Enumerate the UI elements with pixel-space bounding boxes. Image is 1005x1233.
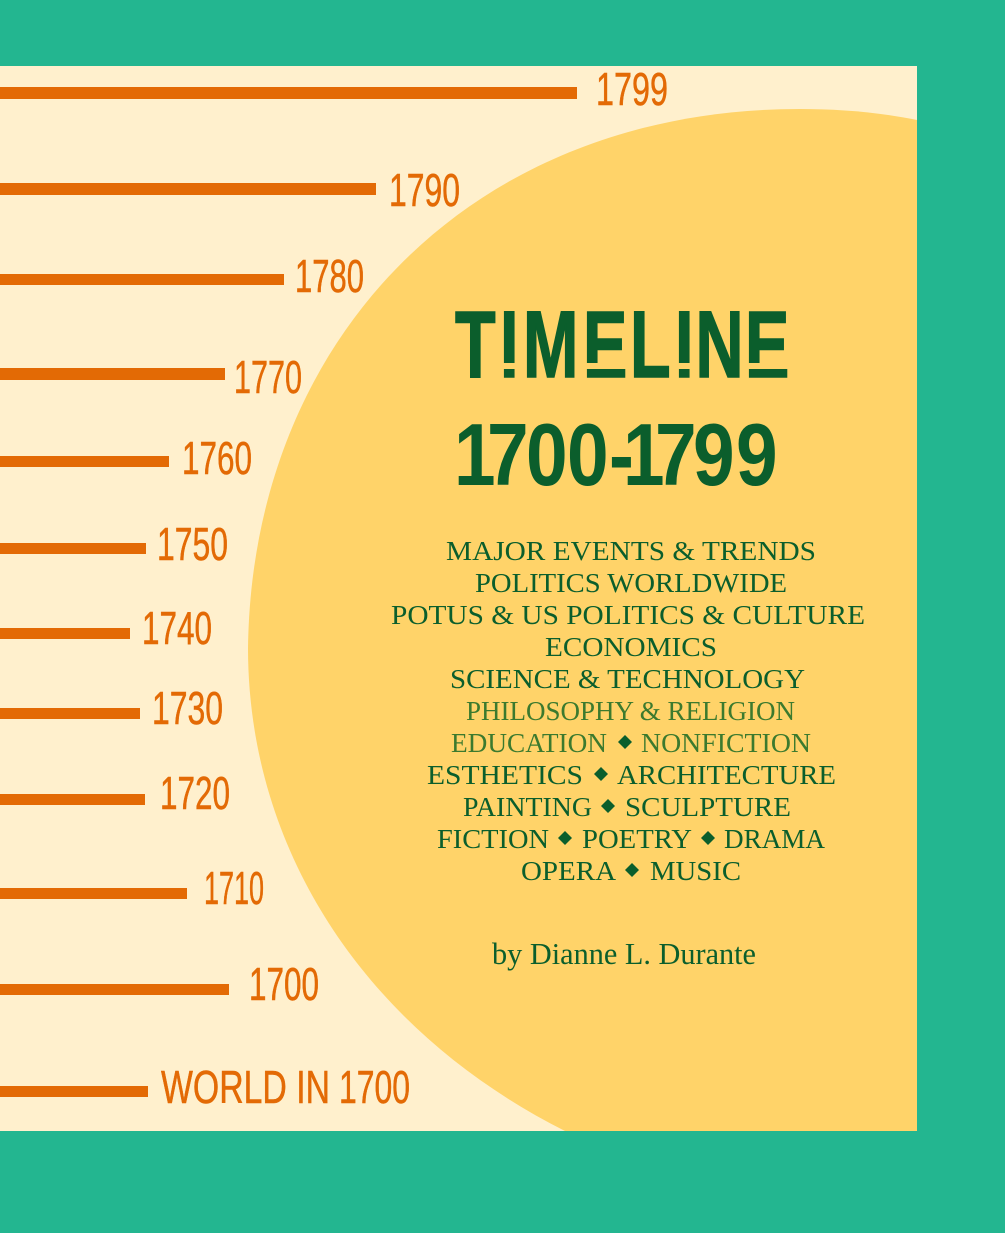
line: esthetics: ARCHITECTURE bbox=[617, 760, 836, 790]
line: major events: MAJOR EVENTS & TRENDS bbox=[446, 536, 816, 566]
date range: 1700-1799 bbox=[454, 406, 778, 504]
line: painting bbox=[463, 792, 791, 822]
cream panel bbox=[0, 66, 917, 1131]
line: education: NONFICTION bbox=[641, 728, 811, 758]
timeline: 1730 bbox=[0, 682, 223, 734]
timeline: 1700 bbox=[0, 958, 319, 1010]
timeline: 1750: 1750 bbox=[157, 518, 228, 570]
timeline: world in 1700 bbox=[0, 1061, 410, 1113]
timeline: 1700: 1700 bbox=[249, 958, 319, 1010]
timeline: 1790: 1790 bbox=[389, 164, 460, 216]
timeline: 1720: 1720 bbox=[160, 767, 230, 819]
timeline: 1760 bbox=[0, 432, 252, 484]
line: economics: ECONOMICS bbox=[545, 632, 717, 662]
timeline: 1710: 1710 bbox=[204, 862, 264, 914]
timeline: world in 1700: WORLD IN bbox=[161, 1061, 330, 1113]
line: education: EDUCATION bbox=[451, 728, 607, 758]
line: fiction: POETRY bbox=[582, 824, 692, 854]
timeline: 1740: 1740 bbox=[142, 602, 212, 654]
timeline: 1750 bbox=[0, 518, 228, 570]
line: science: SCIENCE & TECHNOLOGY bbox=[450, 664, 805, 694]
line: opera bbox=[521, 856, 741, 886]
author: by Dianne L. Durante bbox=[492, 936, 756, 971]
timeline: 1730: 1730 bbox=[152, 682, 223, 734]
timeline: 1780 bbox=[0, 250, 364, 302]
timeline: 1799: 1799 bbox=[596, 63, 668, 115]
timeline: 1720 bbox=[0, 767, 230, 819]
line: fiction: DRAMA bbox=[724, 824, 825, 854]
timeline: world in 1700: 1700 bbox=[339, 1061, 410, 1113]
timeline: 1790 bbox=[0, 164, 460, 216]
line: philosophy: PHILOSOPHY & RELIGION bbox=[466, 696, 795, 726]
timeline: 1740 bbox=[0, 602, 212, 654]
line: fiction bbox=[437, 824, 825, 854]
timeline: 1760: 1760 bbox=[182, 432, 252, 484]
timeline: 1780: 1780 bbox=[295, 250, 364, 302]
line: opera: OPERA bbox=[521, 856, 617, 886]
line: opera: MUSIC bbox=[650, 856, 741, 886]
line: politics worldwide: POLITICS WORLDWIDE bbox=[475, 568, 787, 598]
timeline: 1799 bbox=[0, 63, 668, 115]
line: fiction: FICTION bbox=[437, 824, 549, 854]
timeline: 1770 bbox=[0, 351, 302, 403]
line: esthetics bbox=[427, 760, 836, 790]
line: education bbox=[451, 728, 811, 758]
title: TIMELINE bbox=[455, 292, 789, 398]
line: potus: POTUS & US POLITICS & CULTURE bbox=[391, 600, 865, 630]
yellow circle bbox=[248, 109, 917, 1131]
line: painting: SCULPTURE bbox=[625, 792, 791, 822]
line: painting: PAINTING bbox=[463, 792, 592, 822]
line: esthetics: ESTHETICS bbox=[427, 760, 583, 790]
timeline: 1770: 1770 bbox=[234, 351, 302, 403]
contents list bbox=[391, 536, 865, 886]
timeline: 1710 bbox=[0, 862, 264, 914]
